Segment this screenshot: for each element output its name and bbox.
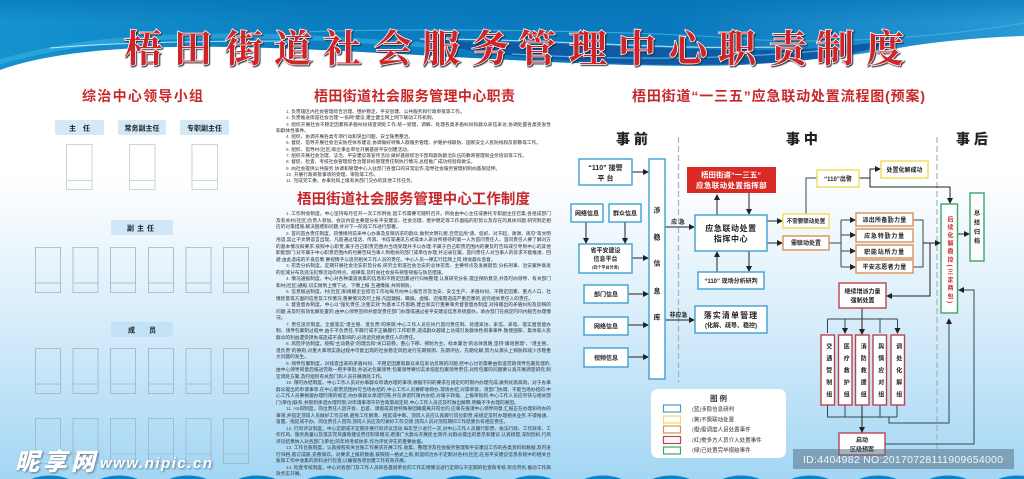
box: department info (584, 285, 628, 303)
watermark: nipic logo: www.nipic.cn (100, 455, 212, 472)
box: command headquarters: 应急联动处置指挥部 (696, 180, 767, 190)
box: resolved (881, 161, 928, 178)
box: stability information library: 涉 (654, 206, 660, 214)
box: no linkage needed (783, 214, 829, 228)
box: 110 dispatch: “110”出警 (824, 175, 852, 183)
box: medical rescue group: 医疗救护组 (842, 343, 849, 404)
box: functional station force (856, 245, 913, 258)
text block: responsibilities: 1. 负责辖区内社会管理综合治理、维护稳定、平安创建、公共服务和行政审批等工作。 (286, 109, 465, 114)
box: district plan: 区级预案 (850, 446, 874, 454)
box: fire rescue group (856, 335, 869, 405)
header banner (0, 0, 1024, 70)
text block: work system: 14. 检查考核制度。中心对各部门及工作人员和各基层单位的工作实绩情况进行定期与不定期的检查和考核,奖优罚劣,推动工作高效务实开展。 (276, 464, 551, 476)
heading: responsibilities: 梧田街道社会服务管理中心职责 (314, 88, 515, 104)
box: traffic control group: 交通管制组 (825, 342, 832, 404)
box: stability information library: 库 (654, 312, 660, 322)
label: members (111, 322, 173, 337)
box: provincial platform: 信息平台 (593, 255, 618, 263)
box: 110 hotline platform: 平 台 (598, 174, 613, 182)
box: checklist management: (化解、疏导、稳控) (705, 322, 757, 330)
box: special duty force (856, 229, 913, 242)
box: volunteer force: 平安志愿者力量 (862, 263, 907, 271)
box: summary archive: 总 (974, 209, 980, 217)
box: provincial platform: 省平安建设 (590, 246, 621, 254)
box: network info: 网络信息 (594, 322, 618, 330)
text block: responsibilities: 8. 督促、检查、考核社会管理综合治理目标管理责任制执行情况,总结推广成功经验和做法。 (286, 159, 475, 164)
text block: responsibilities: 3. 组织开展社会不稳定因素和矛盾纠纷排查调处工作,统一受理、调解、处理各类矛盾纠纷和群众来信来访,协调处置各类突发性和群体性事件。 (276, 122, 551, 133)
photo frames: members row one (36, 348, 248, 394)
label: full-time deputy: 专职副主任 (187, 124, 222, 132)
box: 110 dispatch (817, 170, 859, 187)
text block: work system: 2. 首问首办责任制度。热情接待前来中心办事及反映诉求的群众,做到文明礼貌,自觉运用“请、您好、对不起、谢谢、再见”等文明用语,禁止不文明语言出现。凡是通过电话、传真、书信等通讯方式或本人来访所接待的第一人为首问责任人。首问责任人要了解对方的基本情况和要求,按照中心职责,属于自己职责范围内当场受理并予以办理;不属于自己职责范围内的要及时告知或引导到中心的其他职能部门;对不属于中心职责范围内的也要告知当事人到相关的部门或单位办理,并记录在案。首问责任人对当事人的诉求不能推诿、回避,由此造成的不良后果,要视情予以追究相关工作人员的责任。中心人员一律实行挂牌上岗,接收群众监督。 (276, 230, 551, 262)
box: district plan: 启动 (856, 436, 868, 444)
text block: work system: 13. 工作台账制度。认真按照有关台账工作要求开展工作,收集、整理涉及社会服务管理和平安建设工作的各类资料和数据,及时进行归档,装订成册,妥善保存。对要求上报的数据,按照统一格式上报,街道综治办不定期对各村(社区)在省平安建设信息系统中的相关台账和工作中收集的资料进行检查,以确保各项创建工作有效开展。 (276, 445, 551, 463)
legend: (绿)已处置完毕报结事件 (692, 446, 751, 454)
bottom scallop decoration (23, 476, 1024, 479)
label: executive deputy (118, 120, 166, 135)
box: network info (584, 317, 628, 335)
box: public info: 群众信息 (613, 210, 637, 218)
label: full-time deputy (180, 120, 229, 135)
box: fire rescue group: 消防救援组 (859, 342, 866, 404)
text block: responsibilities: 9. 向社会提供公共服务,协调和管理中心入驻部门各窗口的日常运作,指导社会服务管理机制向基层延伸。 (286, 166, 500, 171)
box: command center: 应急联动处置 (705, 223, 757, 233)
phase dividers (678, 137, 937, 458)
box: public opinion group (873, 335, 886, 405)
connectors (586, 169, 974, 444)
box: grid info (571, 204, 603, 222)
text block: responsibilities: 2. 负责推进街道社会治理“一张网”建设,建立健全网上网下联动工作机制。 (286, 115, 436, 120)
box: video info: 视频信息 (594, 354, 618, 362)
photo frames: deputy row (36, 248, 248, 292)
text block: work system: 3. 形势分析制度。定期开展社会治安形势分析,研究全街道社会治安的总体形势、主要特点及发展趋势,分析刑事、治安案件高发的区域分布及违法犯罪活动的特点、规律等,及时向社会发布预警预报与防范措施。 (276, 263, 551, 274)
text block: work system: 1. 工作例会制度。中心坚持每月召开一次工作例会,因工作需要可随时召开。例会由中心主任或委托专职副主任召集,各组成部门及有关村(社区)负责人参加。会议内容主要是分析平安建设、社会治理、维护稳定等工作面临的形势以及存在的具体问题,研究制定相应的对策措施,解决困难和问题,并对下一阶段工作进行部署。 (276, 211, 551, 229)
watermark: image id bar (793, 449, 1014, 469)
box: stability information library (649, 159, 665, 379)
box: grid info: 网络信息 (575, 210, 599, 218)
label: director (55, 120, 104, 135)
text block: work system: 11. AB岗制度。岗位责任人因开会、出差、请假或其他特殊原因确需离开岗位的,应事先报请中心领导同意,汇报正在办理和待办的事项,并指定顶岗人员做好工作交接,避免工作脱滑、拖延或中断。顶岗人员应认真履行岗位职责,按规定及时办理相关业务,不得推诿、冒置、拖延或不办。岗位责任人回岗,顶岗人员应及时做好工作交接,顶岗人员对顶岗期间工作结果负有相应责任。 (276, 406, 551, 424)
text block: work system: 6. 督查督办制度。中心以“强化责任,注重实效”为基本工作思路,建立和实行重要事务督查督办制度,对排摸出的矛盾纠纷及反映的问题,未及时有效化解处置的,由中心领导签阅并督促责任部门办理或通过省平安建设信息系统督办。承办部门在规定时间内报告办理情况。 (276, 302, 551, 320)
box: summary archive: 归 (974, 228, 980, 236)
text block: responsibilities: 6. 组织、指导村(社区)和企事业单位开展基层平安创建活动。 (286, 147, 412, 152)
box: 110 hotline platform: “110” 接警 (588, 163, 623, 172)
heading: leadership group: 综治中心领导小组 (82, 88, 203, 104)
box: follow-up stabilization: 后续化解稳控(三定两包) (946, 215, 953, 305)
box: functional station force: 职能站所力量 (864, 248, 905, 256)
photo frames: members row two (36, 418, 248, 464)
phase heading: during: 事 中 (786, 131, 818, 147)
box: linkage needed (783, 236, 829, 250)
title: 梧田街道社会服务管理中心职责制度 (124, 18, 904, 73)
text block: work system: 8. 风险评估制度。按照“主动稳妥”的理念和“关口前移、重心下移、预防为主、标本兼治”的总体思路,坚持“属地管理”、“谁主管、谁负责”的原则,对重大事项实施过程中可能出现的社会稳定风险进行先期预测、先期评估、先期化解,努力从源头上预防和减少涉稳重大问题的发生。 (276, 341, 551, 359)
panel: leadership group (36, 120, 248, 464)
heading: work system: 梧田街道社会服务管理中心工作制度 (297, 190, 530, 208)
box: police station force (856, 213, 913, 226)
box: volunteer force (856, 260, 913, 273)
watermark: nipic logo (15, 449, 212, 476)
box: follow-up stabilization (941, 204, 958, 313)
box: command center (695, 215, 767, 251)
box: linkage needed: 需联动处置 (791, 239, 821, 247)
text block: work system: 7. 责任追究制度。全面落实“谁主管、谁负责”的原则,中心工作人员在执行首问责任制、处理来访、来信、来电、落实督查督办制、领导包案制过程中,由于不负责任,不履行或不正确履行工作职责,造成群众越级上访或引发群体性闹事事件,致使国家、集体和人民群众的利益遭受损失或造成不良影响的,必须追究相关责任人的责任。 (276, 322, 551, 340)
box: summary archive (970, 193, 984, 261)
box: command headquarters (687, 167, 776, 193)
box: district plan (839, 433, 885, 455)
box: stability information library: 信 (654, 258, 660, 268)
text block: responsibilities: 11. 完成党工委、办事处和上级有关部门交办的其他工作任务。 (286, 178, 415, 183)
box: additional force: 继续增派力量 (844, 288, 881, 296)
text block: work system: 4. 情况通报制度。中心对各种渠道收集的信息和不稳定因素进行归纳整理,认真研究分析,提出预防意见,并及时向领导、有关部门和村(社区)通报,切实做到上情下达、下情上报,互通情报,共同预防。 (276, 276, 551, 288)
label: non-emergency: 非应急 (669, 311, 688, 319)
box: resolved: 处置化解成功 (886, 166, 923, 174)
box: stability information library: 稳 (654, 232, 660, 242)
box: checklist management: 落实清单管理 (704, 310, 758, 320)
text block: work system: 12. 行风评议制度。中心定期或不定期开展行风评议活动,每年至少进行一次,对中心工作人员履行职责、依法行政、工作效率、工作作风、服务质量以及落实党风廉政建设责任制等情况,邀请广大群众开展民主测评,对群众提出的意见和建议,认真梳理,深刻剖析,行风评议结果纳入对各部门(单位)的年终考核体系,作为评优评先的重要依据。 (276, 426, 551, 444)
label: executive deputy: 常务副主任 (124, 124, 160, 132)
box: police station force: 派出所备勤力量 (862, 216, 907, 224)
box: summary archive: 结 (974, 218, 980, 226)
box: 110 hotline platform (579, 159, 632, 185)
box: 110 on-site analysis (698, 272, 764, 289)
legend: (蓝)涉稳信息研判 (692, 405, 735, 413)
legend: (红)需多方人员介入处置事件 (692, 436, 762, 444)
photo frames: top row (66, 144, 218, 190)
box: provincial platform: (四个平台分流) (592, 264, 619, 270)
text block: work system: 10. 限时办结制度。中心工作人员对办事群众申请办理的事项,根据不同的要求在规定的时限内办理完成,做到优质高效。对于办事群众提出的申请事项,在中心职责范围内可当场办结的,中心工作人员要即收即办,现场办结;对需审批、须部门协调、不能当场办结的,中心工作人员要根据办理时限的规定,向办事群众承诺时限,并在承诺时限内办结,对属于转报、上报审批的,中心工作人员应尽快与相关部门(单位)联系,并限到承诺办理时限;对申请事项不符合政策规定的,中心工作人员应及时做出解释,明确不予办理的原因。 (276, 380, 551, 404)
box: additional force: 强制处置 (850, 296, 875, 304)
box: additional force (839, 283, 886, 308)
box: medical rescue group (838, 335, 852, 405)
box: command center: 指挥中心 (714, 234, 748, 244)
text block: responsibilities: 4. 组织、协调开展各类专项行动和突出问题、安全隐患整治。 (286, 134, 413, 139)
legend: 图 例 (710, 393, 728, 403)
box: mediation group (891, 335, 904, 405)
phase heading: after: 事 后 (956, 131, 988, 147)
legend (651, 389, 786, 458)
box: no linkage needed: 不需要联动处置 (787, 217, 826, 225)
label: deputy directors (111, 220, 173, 235)
box: special duty force: 应急特勤力量 (864, 232, 905, 240)
box: public opinion group: 舆情应对组 (877, 342, 884, 404)
box: public info (609, 204, 641, 222)
text block: work system: 5. 信息报送制度。村(社区)和规模企业综治工作站每月向中心报告涉及治安、安全生产、矛盾纠纷、不稳定因素、重点人口、社情民意等方面的信息及工作情况,重要情况及时上报;凡因漏报、瞒报、虚报、迟报而造成严重后果的,追究相关责任人的责任。 (276, 289, 551, 300)
box: command headquarters: 梧田街道“一三五” (701, 170, 761, 180)
legend: (黄)不需联动处置 (692, 416, 735, 424)
text block: responsibilities: 7. 组织开展社会治理、法治、平安建设等宣传活动,做好基层综治干部和群防群治队伍的教育管理和业务培训等工作。 (286, 153, 527, 158)
label: director: 主 任 (69, 124, 90, 132)
phase heading: before: 事 前 (616, 131, 648, 147)
text block: responsibilities: 5. 督促、指导开展社会治安防控体系建设,协调做好特殊人群服务管理、护路护线联防、国家安全人民防线和反邪教等工作。 (286, 140, 541, 145)
label: members: 成 员 (128, 326, 156, 334)
label: deputy directors: 副主任 (127, 224, 157, 232)
box: department info: 部门信息 (594, 290, 618, 298)
box: provincial platform (579, 244, 632, 273)
box: video info (584, 348, 628, 367)
box: stability information library: 息 (654, 286, 660, 296)
flowchart (571, 131, 988, 458)
watermark: image id bar: ID:4404982 NO:20170728111909654000 (803, 454, 1003, 466)
label: emergency: 应 急 (671, 218, 685, 226)
box: mediation group: 调处化解组 (895, 342, 902, 404)
heading: flowchart: 梧田街道“一三五”应急联动处置流程图(预案) (632, 88, 925, 104)
legend: (橙)需调度人员处置事件 (692, 426, 751, 434)
box: summary archive: 档 (974, 237, 980, 245)
box: 110 on-site analysis: “110” 现场分析研判 (704, 277, 758, 285)
text block: work system (276, 210, 551, 476)
box: traffic control group (821, 335, 834, 405)
text block: responsibilities: 10. 开展行政审批事项的受理、审批等工作。 (286, 172, 378, 177)
box: checklist management (695, 306, 767, 333)
watermark: nipic logo: 昵享网 (15, 449, 99, 476)
text block: responsibilities (276, 108, 551, 183)
text block: work system: 9. 领导包案制度。对排查出来的矛盾纠纷、不稳定因素和群众来信来访反映的问题,经中心讨论需要由街道党政领导包案处理的,由中心领导同意后报送党政一把手审批,并送达包案领导;包案领导要切实承担起包案领导责任,对所包案的问题要认真开展调查研究,制定调处方案,及时组织有关部门和人员开展调处工作。 (276, 360, 551, 378)
